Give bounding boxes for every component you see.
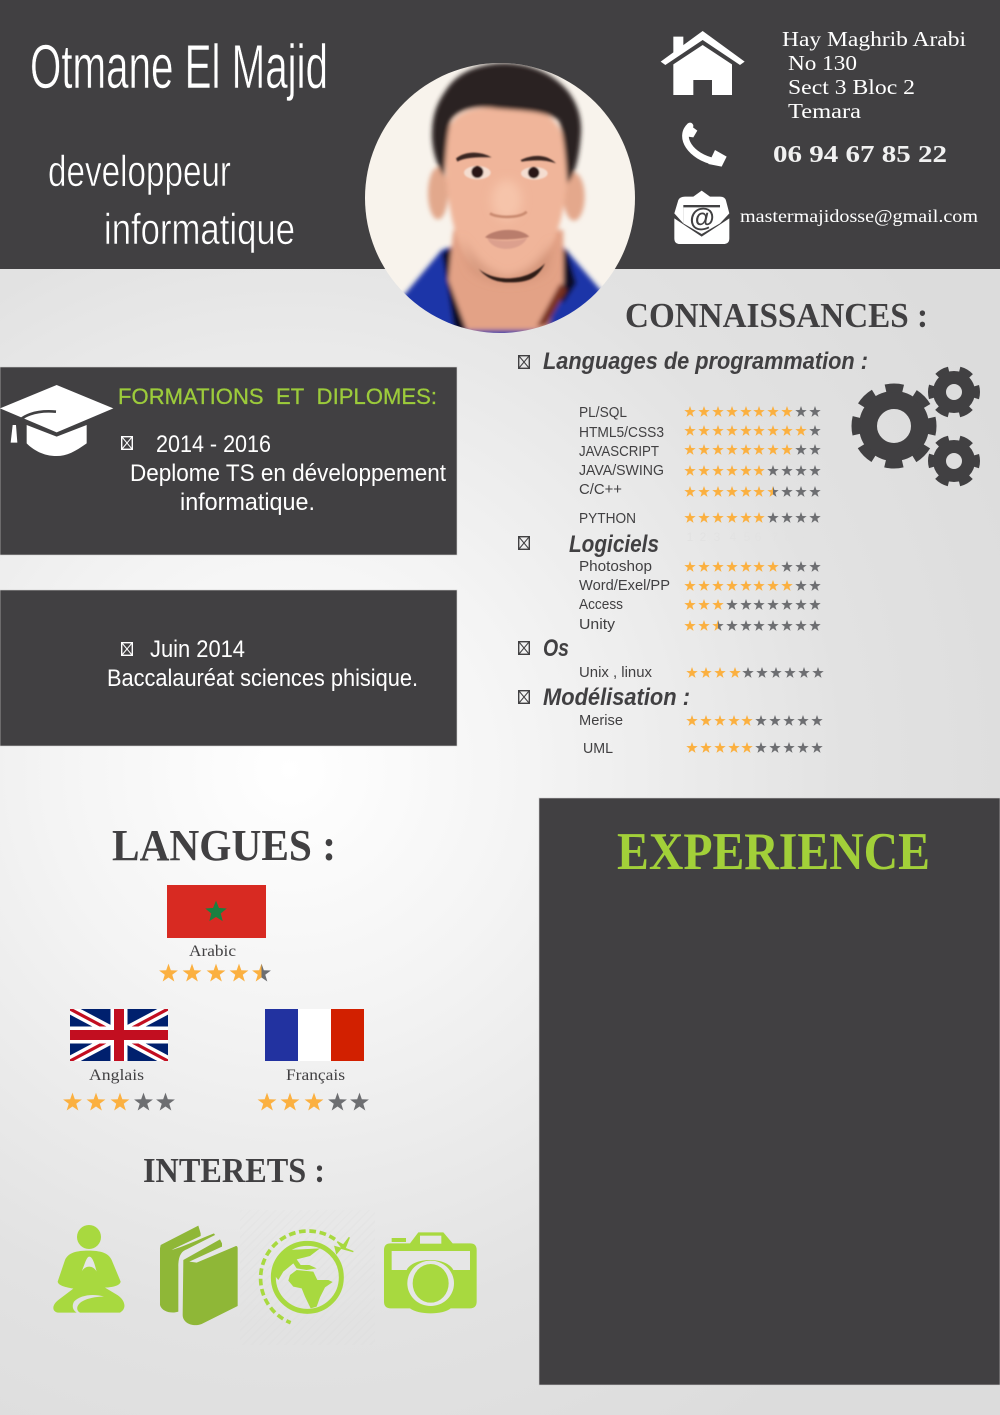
skill: Photoshop: Photoshop [579, 558, 652, 575]
faint scale numbers: 3 [714, 530, 721, 544]
skill: JAVA/SWING [579, 462, 821, 479]
heading: experience: EXPERIENCE [617, 823, 930, 881]
label: Arabic [189, 943, 236, 960]
heading: formations: FORMATIONS ET DIPLOMES: [118, 384, 437, 409]
section: logiciels [519, 531, 821, 633]
bullet [519, 537, 529, 549]
language: anglais [63, 1009, 175, 1111]
panel: formation 2014-2016 [0, 367, 457, 555]
header band [0, 0, 1000, 269]
label: Français [286, 1067, 345, 1084]
bullet [519, 691, 529, 703]
skill: C/C++: C/C++ [579, 481, 622, 498]
baccalaureat text: Juin 2014 [150, 636, 245, 663]
icon: globe with plane [261, 1231, 353, 1323]
subheading: Os [543, 635, 569, 662]
icon: meditation [53, 1225, 124, 1313]
bullet [122, 437, 132, 449]
skill: Unity: Unity [579, 616, 616, 633]
section: languages de programmation [519, 348, 868, 527]
baccalaureat text [107, 636, 418, 692]
title: name: Otmane El Majid [30, 33, 328, 102]
skill: PYTHON: PYTHON [579, 510, 636, 527]
skill: PL/SQL [579, 404, 821, 421]
faint scale numbers: 4 [730, 530, 737, 544]
label: Anglais [89, 1067, 144, 1084]
heading: interets: INTERETS : [143, 1151, 325, 1190]
icon: graduation cap [0, 385, 113, 456]
skill: Access [579, 596, 821, 613]
contact: address [782, 27, 966, 123]
bullet [519, 356, 529, 368]
flag: UK [70, 1009, 168, 1061]
contact: address: Temara [788, 99, 862, 123]
icon: gears [856, 369, 977, 484]
heading: langues: LANGUES : [112, 821, 336, 870]
bullet [122, 643, 132, 655]
formation text: Deplome TS en développement [130, 460, 446, 487]
subheading: Languages de programmation : [543, 348, 868, 375]
formation text: 2014 - 2016 [156, 431, 271, 458]
contact: email: mastermajidosse@gmail.com [740, 206, 978, 226]
icon: house [661, 31, 745, 95]
faint scale numbers: 10 [810, 530, 824, 544]
faint scale numbers: 6 [755, 530, 762, 544]
section: modelisation [519, 684, 823, 757]
panel: baccalaureat [0, 590, 457, 746]
skill: PYTHON [579, 510, 821, 527]
icon: email envelope: @ [689, 202, 715, 232]
icon: camera [384, 1232, 477, 1313]
skill: UML: UML [583, 740, 613, 757]
skill: JAVASCRIPT: JAVASCRIPT [579, 443, 659, 460]
subtitle: job title: developpeur [48, 147, 231, 196]
skill: PL/SQL: PL/SQL [579, 404, 627, 421]
skill: JAVA/SWING: JAVA/SWING [579, 462, 664, 479]
faint scale numbers: 7 [772, 530, 779, 544]
formation text: informatique. [180, 489, 315, 516]
faint scale numbers: 8 [785, 530, 792, 544]
flag: Morocco [167, 885, 266, 938]
rating stars [63, 1093, 175, 1111]
icon: email envelope [674, 191, 729, 244]
faint scale numbers: 5 [744, 530, 751, 544]
skill: HTML5/CSS3 [579, 424, 821, 441]
language: arabic [159, 885, 271, 982]
subheading: Modélisation : [543, 684, 690, 711]
portrait photo [365, 63, 635, 333]
contact: address: No 130 [788, 51, 857, 75]
skill: Word/Exel/PP: Word/Exel/PP [579, 577, 670, 594]
skill: C/C++ [579, 481, 821, 498]
subtitle: job title: informatique [104, 205, 295, 254]
skill: HTML5/CSS3: HTML5/CSS3 [579, 424, 664, 441]
faint hatch behind globe [240, 1210, 375, 1345]
icon: books [160, 1226, 238, 1325]
flag: France [265, 1009, 364, 1061]
skill: Merise: Merise [579, 712, 623, 729]
contact: address: Sect 3 Bloc 2 [788, 75, 915, 99]
bullet [519, 642, 529, 654]
skill: Photoshop [579, 558, 821, 575]
skill: Unix, linux: Unix , linux [579, 664, 652, 681]
formation text [130, 431, 446, 516]
panel: experience [539, 798, 1000, 1385]
language: francais [258, 1009, 369, 1111]
rating stars [159, 964, 271, 982]
skill: Unix, linux [579, 664, 824, 681]
subheading: Logiciels [569, 531, 659, 558]
baccalaureat text: Baccalauréat sciences phisique. [107, 665, 418, 692]
faint scale numbers: 2 [700, 530, 707, 544]
faint scale numbers: 1 [687, 530, 694, 544]
contact: phone number: 06 94 67 85 22 [773, 142, 947, 168]
subtitle: job title [48, 147, 295, 254]
skill: UML [583, 740, 823, 757]
heading: connaissances: CONNAISSANCES : [625, 296, 928, 335]
contact: address: Hay Maghrib Arabi [782, 27, 966, 51]
skill: Unity [579, 616, 821, 633]
skill: Word/Exel/PP [579, 577, 821, 594]
section: os [519, 635, 824, 681]
rating stars [258, 1093, 369, 1111]
skill: Access: Access [579, 596, 623, 613]
skill: JAVASCRIPT [579, 443, 821, 460]
faint scale numbers [687, 530, 824, 544]
faint scale numbers: 9 [799, 530, 806, 544]
skill: Merise [579, 712, 823, 729]
icon: telephone [683, 123, 727, 167]
